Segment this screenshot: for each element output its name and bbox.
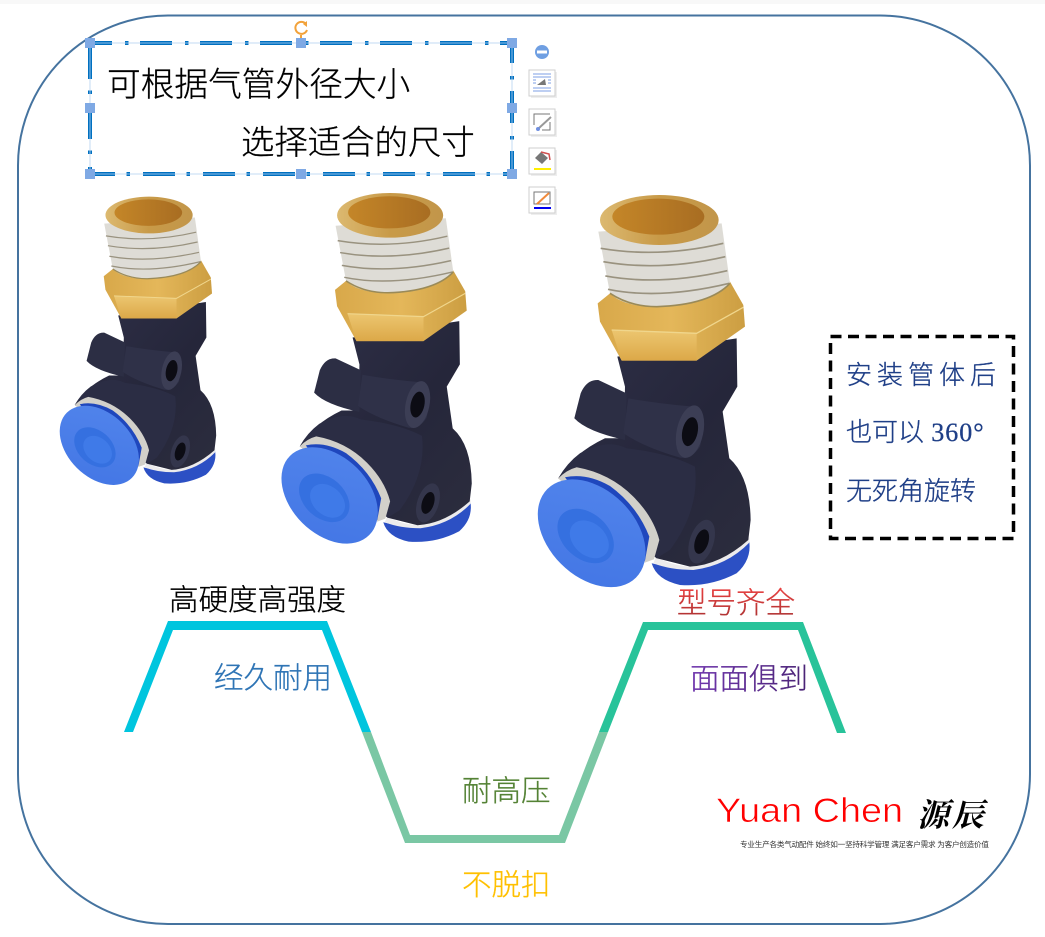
wave line: right teal	[599, 622, 846, 733]
tagline: 专业生产各类气动配件 始终如一坚持科学管理 满足客户需求 为客户创造价值	[740, 839, 989, 849]
editor toolbar icons	[529, 45, 557, 215]
label: thorough: 面面俱到	[690, 663, 808, 696]
icon: collapse	[535, 45, 549, 59]
label: pressure resistant: 耐高压	[462, 775, 551, 808]
icon: outline	[529, 187, 557, 215]
label: no slip: 不脱扣	[462, 869, 551, 902]
callout: rotation	[830, 336, 1014, 538]
selection handles	[85, 38, 517, 179]
heading line 1: 可根据气管外径大小	[107, 66, 410, 104]
icon: layout	[529, 70, 557, 98]
label: full range: 型号齐全	[677, 587, 795, 620]
label: durable: 经久耐用	[214, 662, 332, 695]
small fitting photo	[44, 197, 216, 500]
medium fitting photo	[263, 193, 472, 562]
large fitting photo	[517, 195, 751, 608]
callout: rotation: 无死角旋转	[846, 476, 976, 506]
brand logo: Yuan Chen	[716, 792, 903, 830]
icon: fill	[529, 148, 557, 176]
rotation handle	[295, 21, 307, 43]
brand logo: 源辰	[917, 790, 989, 836]
wave line: left cyan	[124, 621, 371, 732]
callout: rotation: 也可以 360°	[846, 417, 985, 447]
brand logo	[716, 790, 989, 849]
callout: rotation: 安装管体后	[846, 360, 1001, 390]
selected text box	[85, 21, 517, 179]
wave line: middle green	[362, 732, 608, 843]
icon: edit shape	[529, 109, 557, 137]
heading line 2: 选择适合的尺寸	[241, 125, 475, 162]
label: high hardness: 高硬度高强度	[169, 584, 346, 617]
